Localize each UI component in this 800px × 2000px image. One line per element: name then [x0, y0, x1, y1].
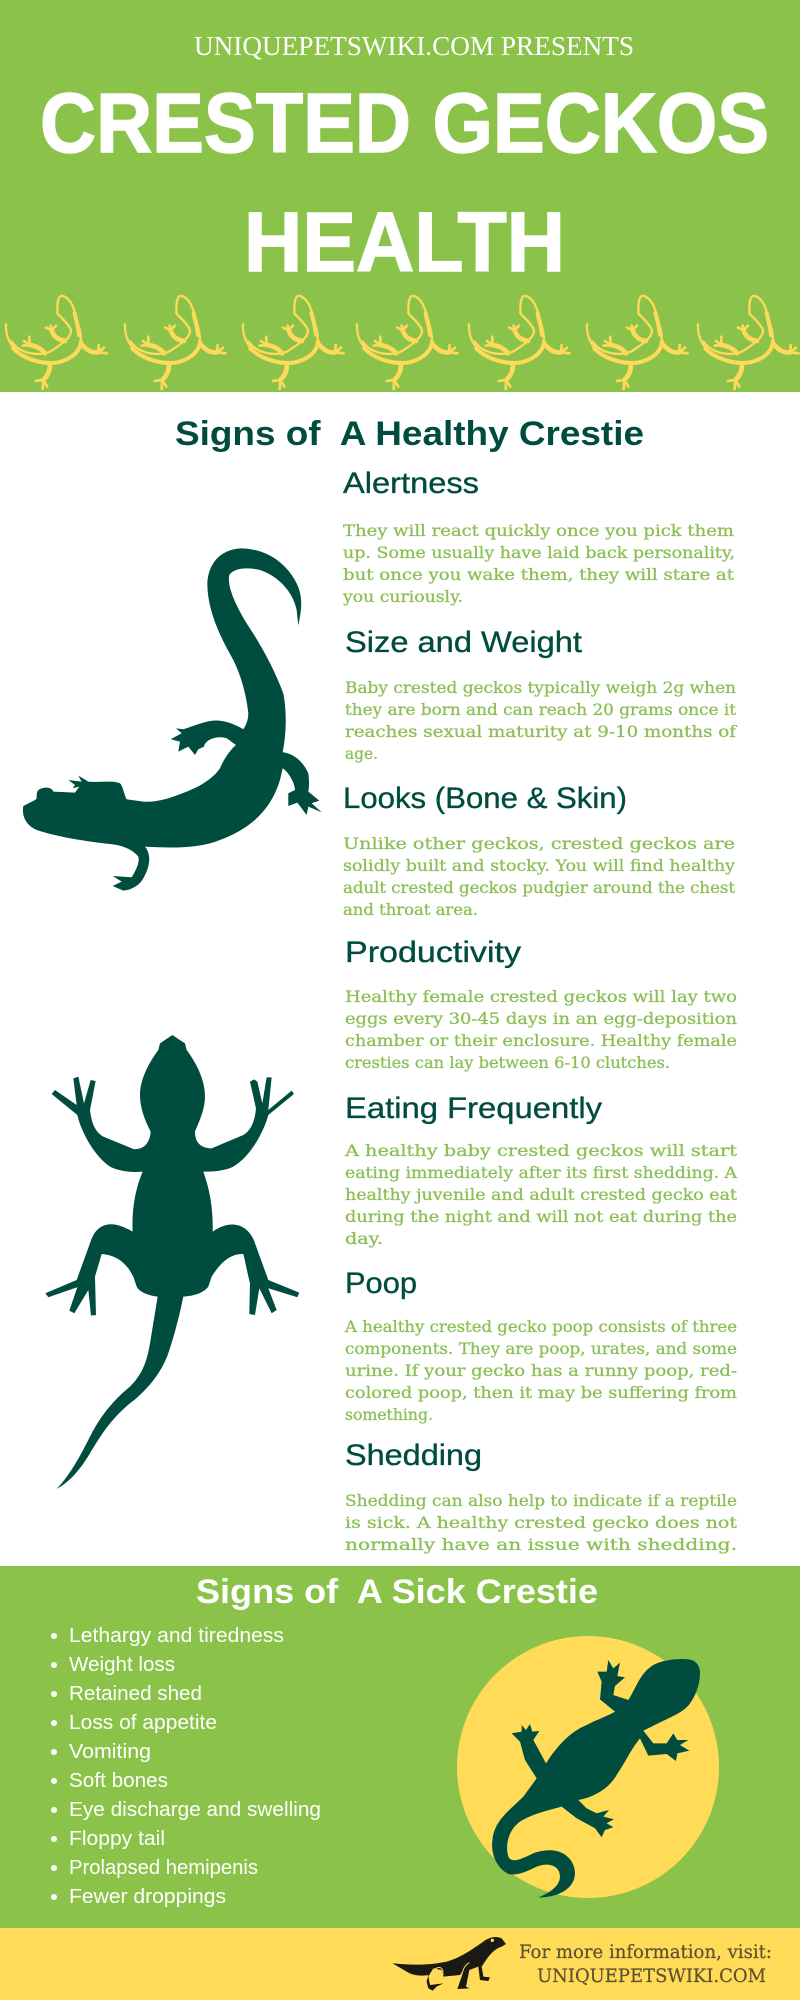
section: productivity: chamber or their enclosure. Healthy female	[345, 1031, 737, 1050]
section: alertness	[342, 467, 735, 606]
section: size and weight: age.	[345, 744, 378, 763]
section: eating frequently: healthy juvenile and adult crested gecko eat	[345, 1185, 738, 1204]
section: size and weight: Baby crested geckos typically weigh 2g when	[345, 678, 736, 697]
section: productivity: Healthy female crested geckos will lay two	[345, 987, 737, 1006]
section: shedding	[345, 1439, 738, 1554]
icon: top-down gecko silhouette	[45, 1035, 299, 1489]
section: alertness: They will react quickly once you pick them	[343, 521, 734, 540]
section: eating frequently: eating immediately after its first shedding. A	[345, 1163, 737, 1182]
section: looks: Looks (Bone & Skin)	[343, 782, 627, 815]
section: looks: Unlike other geckos, crested geckos are	[343, 834, 735, 853]
title line 2: HEALTH	[244, 195, 565, 289]
list of symptoms	[51, 1624, 321, 1908]
section: poop	[344, 1267, 737, 1424]
section: shedding: is sick. A healthy crested gecko does not	[345, 1513, 738, 1532]
list of symptoms: Vomiting	[69, 1740, 151, 1763]
icon: black lizard	[393, 1937, 506, 1991]
section: shedding: Shedding	[345, 1439, 482, 1472]
section: poop: urine. If your gecko has a runny poop, red-	[345, 1361, 737, 1380]
section: productivity: cresties can lay between 6-10 clutches.	[345, 1053, 670, 1072]
list of symptoms: Weight loss	[69, 1653, 175, 1676]
section: eating frequently: day.	[345, 1229, 383, 1248]
panel: footer: UNIQUEPETSWIKI.COM	[537, 1965, 766, 1987]
heading: healthy crestie: Signs of A Healthy Crestie	[175, 415, 644, 453]
section: eating frequently: during the night and will not eat during the	[345, 1207, 737, 1226]
panel: header	[0, 0, 800, 392]
list of symptoms: Eye discharge and swelling	[69, 1798, 321, 1821]
panel: footer	[0, 1928, 800, 2000]
list of symptoms: Retained shed	[69, 1682, 202, 1705]
section: alertness: up. Some usually have laid back personality,	[343, 543, 735, 562]
section: eating frequently	[344, 1092, 738, 1248]
section: eating frequently: Eating Frequently	[345, 1092, 602, 1125]
icon: gecko on circle	[492, 1659, 700, 1898]
section: looks: adult crested geckos pudgier around the chest	[343, 878, 736, 897]
section: poop: components. They are poop, urates, and some	[345, 1339, 737, 1358]
presents line: UNIQUEPETSWIKI.COM PRESENTS	[194, 31, 634, 61]
footer text: For more information, visit:	[519, 1941, 772, 1963]
list of symptoms: Fewer droppings	[69, 1885, 226, 1908]
icon: curled gecko silhouette	[23, 548, 322, 891]
section: looks: and throat area.	[343, 900, 478, 919]
section: shedding: Shedding can also help to indicate if a reptile	[345, 1491, 737, 1510]
section: alertness: but once you wake them, they will stare at	[343, 565, 735, 584]
section: productivity: Productivity	[345, 936, 521, 969]
section: size and weight	[345, 626, 737, 763]
section: alertness: Alertness	[343, 467, 479, 500]
section: poop: colored poop, then it may be suffering from	[345, 1383, 737, 1402]
section: size and weight: reaches sexual maturity at 9-10 months of	[345, 722, 737, 741]
section: alertness: you curiously.	[342, 587, 463, 606]
list of symptoms: Prolapsed hemipenis	[69, 1856, 258, 1879]
list of symptoms: Floppy tail	[69, 1827, 165, 1850]
section: poop: A healthy crested gecko poop consists of three	[344, 1317, 737, 1336]
section: productivity	[345, 936, 737, 1072]
panel: sick crestie	[0, 1566, 800, 1928]
section: productivity: eggs every 30-45 days in an egg-deposition	[345, 1009, 737, 1028]
list of symptoms: Loss of appetite	[69, 1711, 217, 1734]
heading: sick crestie: Signs of A Sick Crestie	[196, 1573, 598, 1611]
yellow circle	[457, 1636, 719, 1898]
section: size and weight: Size and Weight	[345, 626, 583, 659]
list of symptoms: Lethargy and tiredness	[69, 1624, 284, 1647]
gecko pattern band	[6, 296, 799, 389]
section: looks	[343, 782, 736, 919]
section: size and weight: they are born and can reach 20 grams once it	[345, 700, 737, 719]
section: shedding: normally have an issue with shedding.	[345, 1535, 737, 1554]
section: eating frequently: A healthy baby crested geckos will start	[344, 1141, 738, 1160]
list of symptoms: Soft bones	[69, 1769, 168, 1792]
section: poop: something.	[345, 1405, 433, 1424]
section: poop: Poop	[345, 1267, 417, 1300]
section: looks: solidly built and stocky. You will find healthy	[343, 856, 735, 875]
